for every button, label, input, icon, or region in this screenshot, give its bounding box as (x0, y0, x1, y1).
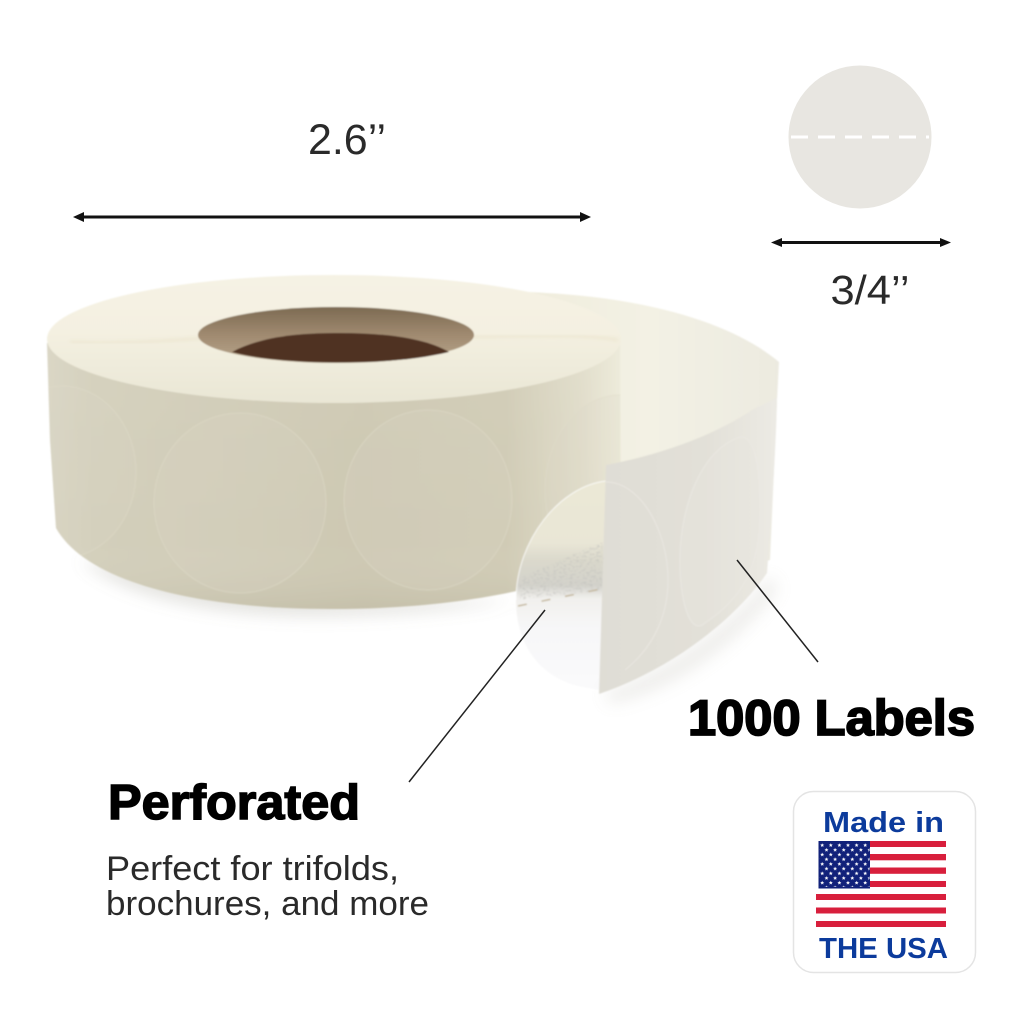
front sheet shadow (604, 575, 778, 704)
badge card (794, 792, 976, 972)
callout line: label count (737, 560, 818, 662)
roll side shading (47, 340, 621, 609)
roll side (47, 340, 621, 609)
arrow: label diameter (771, 238, 951, 247)
unrolled strip back (525, 292, 779, 610)
labels on front sheet (606, 437, 760, 670)
heading: 1000 Labels: 1000 Labels (688, 690, 975, 746)
badge text bottom: THE USA (819, 933, 948, 965)
dark core interior (232, 333, 449, 362)
roll top face (47, 275, 621, 403)
heading: Perforated: Perforated (108, 776, 360, 830)
badge: made in the USA (794, 792, 976, 972)
arrow: roll width (73, 212, 591, 222)
peeled transparent label (516, 484, 603, 628)
text block: perforated description: Perfect for trifolds, (106, 850, 399, 888)
icon: American flag (816, 841, 946, 927)
dimension label: label diameter: 3/4’’ (830, 267, 910, 313)
labels on roll side (378, 427, 478, 590)
roll core hole (198, 307, 474, 363)
front sheet of labels (599, 398, 777, 694)
dimension label: roll width: 2.6’’ (308, 116, 386, 164)
roll shadow (80, 560, 540, 616)
badge text top: Made in (823, 807, 944, 839)
text block: perforated description: brochures, and more (106, 885, 429, 923)
peeled label edge (516, 481, 606, 600)
icon: single label circle with perforation (788, 66, 932, 208)
callout line: perforated (409, 610, 545, 782)
photo: label roll with peeled sheet (0, 275, 779, 704)
text block: perforated description (106, 850, 429, 923)
seam on top face (70, 336, 618, 343)
